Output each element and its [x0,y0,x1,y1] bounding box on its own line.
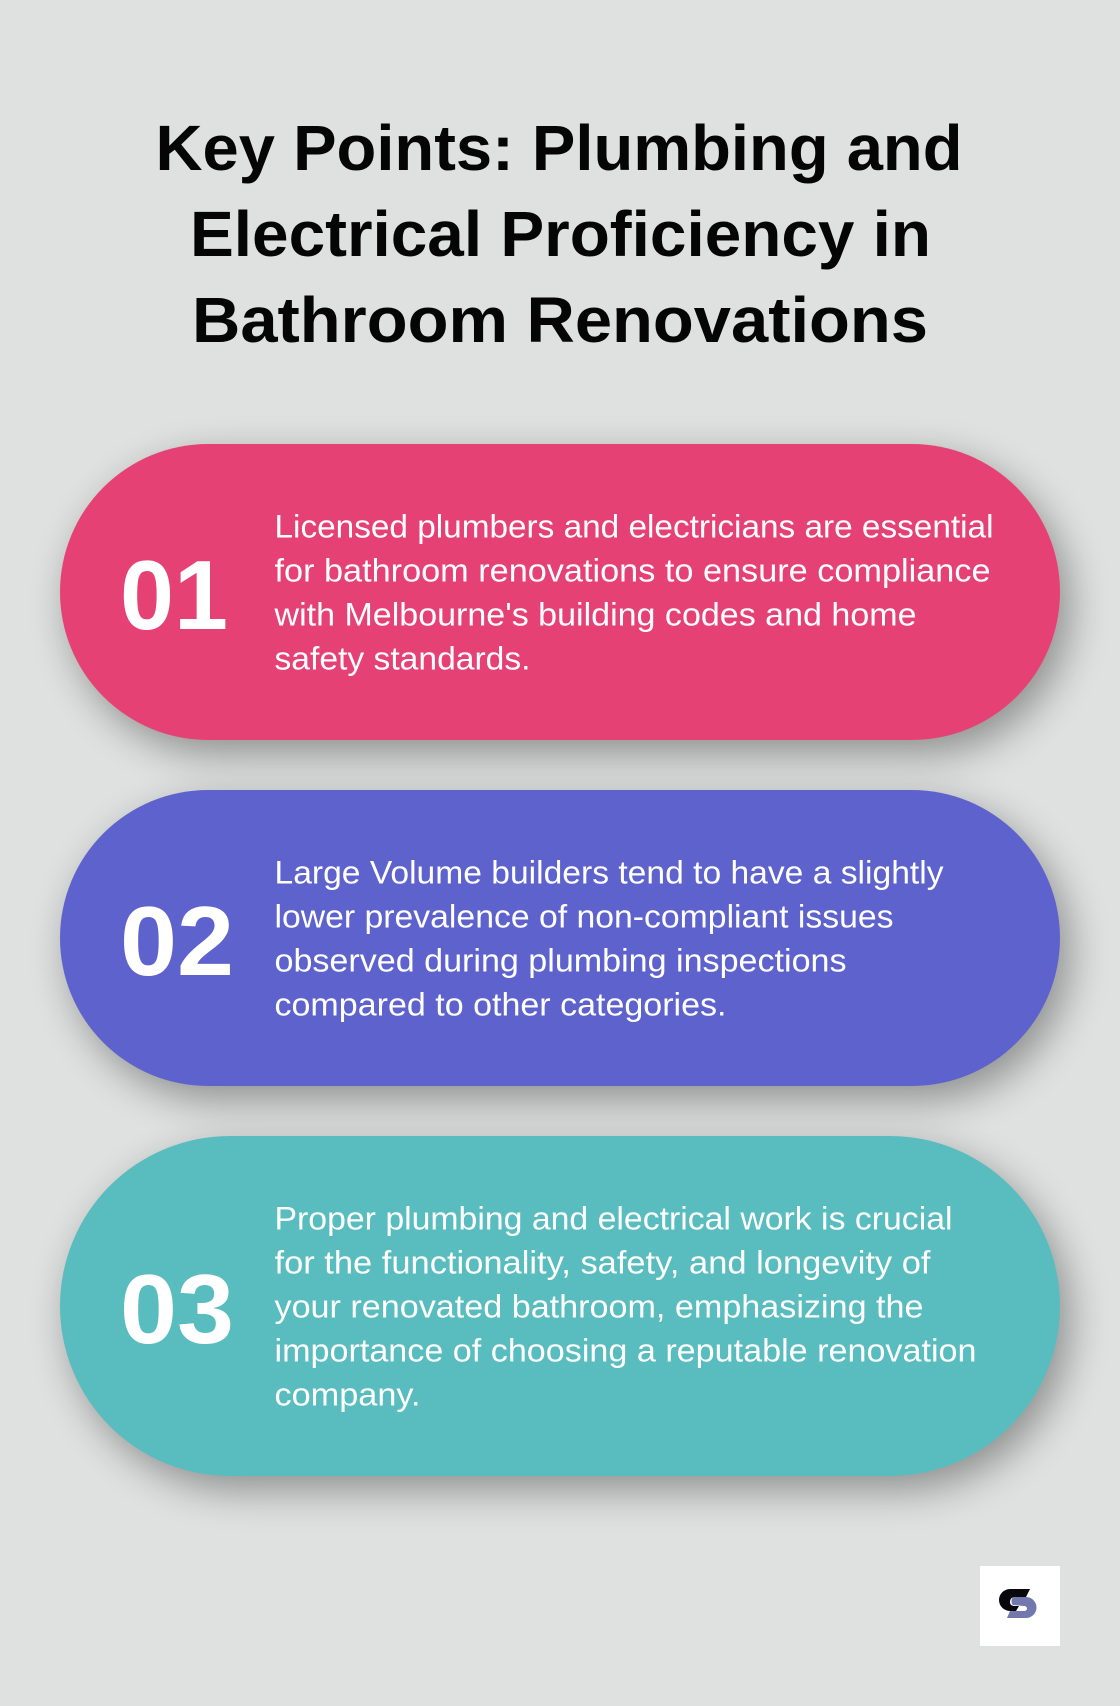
text block 01: Licensed plumbers and electricians are essential [274,508,994,544]
text block 03: your renovated bathroom, emphasizing the [274,1288,924,1324]
text block 03: Proper plumbing and electrical work is crucial [274,1200,952,1236]
text block 03: company. [274,1376,420,1412]
text block 03 [274,1200,976,1412]
text block 03: importance of choosing a reputable renovation [274,1332,976,1368]
text block 03: for the functionality, safety, and longevity of [274,1244,931,1280]
title: Electrical Proficiency in [190,198,931,270]
text block 01 [273,508,994,676]
text block 02: observed during plumbing inspections [274,942,846,978]
text block 01: with Melbourne's building codes and home [273,596,916,632]
title: Key Points: Plumbing and [156,112,962,184]
number 01: 01 [120,540,228,650]
pill background indigo [60,790,1060,1086]
panel: point 02 [60,790,1060,1086]
text block 02 [274,854,944,1022]
text block 02: lower prevalence of non-compliant issues [274,898,894,934]
panel: point 03 [60,1136,1060,1476]
pill background pink [60,444,1060,740]
text block 01: for bathroom renovations to ensure compliance [274,552,990,588]
title [156,112,962,356]
text block 02: Large Volume builders tend to have a slightly [274,854,944,890]
pill background teal [60,1136,1060,1476]
panel: point 01 [60,444,1060,740]
icon: logo badge [980,1566,1060,1646]
number 03: 03 [120,1254,234,1364]
text block 02: compared to other categories. [274,986,726,1022]
text block 01: safety standards. [274,640,530,676]
number 02: 02 [120,886,234,996]
title: Bathroom Renovations [192,284,928,356]
